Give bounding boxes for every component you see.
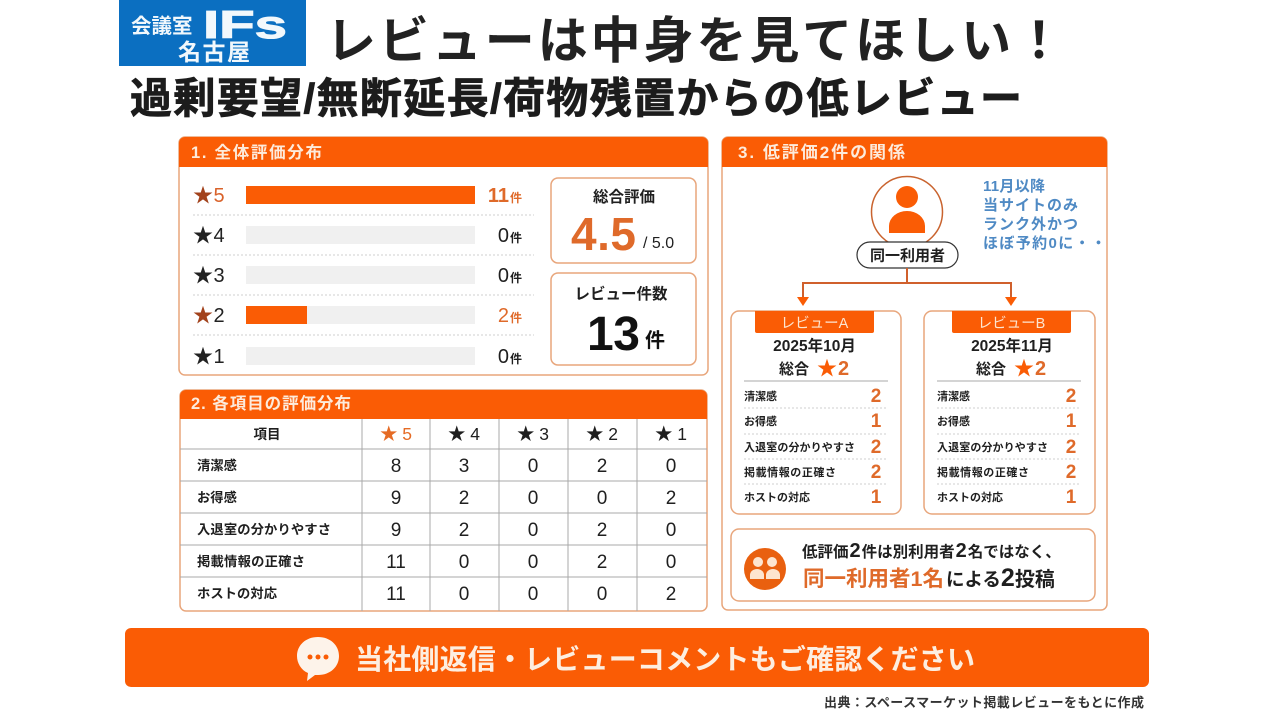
card: review B: 2 <box>1066 437 1076 458</box>
table row: listing accuracy: 2 <box>597 552 607 573</box>
table header row <box>254 424 687 444</box>
panel heading 1 <box>179 137 708 167</box>
panel heading 1: 1. 全体評価分布 <box>191 142 322 162</box>
card: review A: 2 <box>871 437 881 458</box>
callout: same user conclusion <box>731 529 1095 601</box>
card: review B: ★ <box>1014 358 1034 380</box>
banner: please check replies and comments <box>125 628 1149 687</box>
icon: two people <box>744 548 786 590</box>
card: review A: 1 <box>871 487 882 508</box>
card: overall score <box>551 178 696 263</box>
table row: cleanliness: 3 <box>459 456 469 477</box>
card: review B: 2025年11月 <box>971 336 1053 355</box>
row: 5 stars: 11 <box>488 185 509 207</box>
table row: value: お得感 <box>197 489 237 505</box>
note: blue annotation <box>983 178 1106 252</box>
row: 4 stars: ★4 <box>193 225 225 247</box>
card: review A: 2 <box>871 386 881 407</box>
table row: value: 2 <box>666 488 676 509</box>
table row: host response: 0 <box>528 584 538 605</box>
table row: cleanliness: 0 <box>666 456 676 477</box>
card: review B: ホストの対応 <box>937 490 1003 504</box>
tag: review B: レビューB <box>978 315 1045 332</box>
row: 5 stars <box>193 185 522 207</box>
note: blue annotation: ほぼ予約0に・・ <box>983 235 1106 252</box>
card: review A: ホストの対応 <box>744 490 810 504</box>
title: レビューは中身を見てほしい！ <box>326 13 1064 69</box>
row: 2 stars: ★2 <box>193 305 225 327</box>
note: blue annotation: ランク外かつ <box>983 215 1078 233</box>
table row: host response: 0 <box>459 584 469 605</box>
row: 2 stars: 件 <box>510 310 522 325</box>
card: review B: 総合 <box>976 361 1006 378</box>
icon: speech bubble <box>297 637 339 681</box>
row: 3 stars: ★3 <box>193 265 225 287</box>
same user label <box>857 242 958 268</box>
card: review B: 掲載情報の正確さ <box>937 465 1029 479</box>
row: 2 stars <box>193 305 522 327</box>
logo: IFs <box>203 4 287 47</box>
card: overall score: 4.5 <box>571 208 636 260</box>
row: 1 star <box>193 346 522 368</box>
table header row: ★ 1 <box>655 424 687 444</box>
row: 4 stars <box>193 225 522 247</box>
card: review A: 総合 <box>779 361 809 378</box>
card: review B: 1 <box>1066 487 1077 508</box>
card: review B: 2 <box>1066 386 1076 407</box>
card: review count: 件 <box>645 329 665 352</box>
table row: ease of entry: 0 <box>666 520 676 541</box>
banner: please check replies and comments: 当社側返信・レビューコメントもご確認ください <box>355 643 975 675</box>
card: review A: 入退室の分かりやすさ <box>744 440 855 454</box>
card: review B: 1 <box>1066 411 1077 432</box>
panel: per-item rating table <box>180 390 707 611</box>
table row: listing accuracy: 掲載情報の正確さ <box>197 553 305 569</box>
table row: host response: 11 <box>386 584 406 605</box>
card: review A: 清潔感 <box>744 389 777 403</box>
table row: cleanliness: 2 <box>597 456 607 477</box>
table row: listing accuracy: 0 <box>459 552 469 573</box>
row: 3 stars <box>193 265 522 287</box>
table header row: 項目 <box>254 427 280 442</box>
card: review B: 2 <box>1066 462 1076 483</box>
card: review count: レビュー件数 <box>574 284 668 303</box>
tag: review A <box>755 311 874 333</box>
panel: relationship of the two low ratings <box>722 137 1107 610</box>
table row: cleanliness: 0 <box>528 456 538 477</box>
table row: value: 0 <box>528 488 538 509</box>
row: 5 stars: 件 <box>510 190 522 205</box>
table header row: ★ 2 <box>586 424 618 444</box>
logo: 会議室 <box>131 15 192 38</box>
tag: review A: レビューA <box>781 315 849 332</box>
table row: ease of entry <box>197 520 676 541</box>
table row: listing accuracy: 0 <box>528 552 538 573</box>
row: 4 stars: 0 <box>498 225 509 247</box>
table row: ease of entry: 入退室の分かりやすさ <box>197 522 331 537</box>
card: review A: 2 <box>871 462 881 483</box>
card: overall score: 総合評価 <box>593 188 655 206</box>
table row: cleanliness <box>197 456 676 477</box>
row: 1 star: ★1 <box>193 346 225 368</box>
table row: ease of entry: 2 <box>597 520 607 541</box>
panel heading 3: 3. 低評価2件の関係 <box>738 143 905 162</box>
table header row: ★ 3 <box>517 424 549 444</box>
table row: cleanliness: 清潔感 <box>197 457 237 473</box>
card: review A <box>731 311 901 514</box>
table row: host response: 0 <box>597 584 607 605</box>
table row: value <box>197 488 676 509</box>
subtitle: 過剰要望/無断延長/荷物残置からの低レビュー <box>130 75 1022 122</box>
panel heading 2: 2. 各項目の評価分布 <box>191 393 351 413</box>
callout: same user conclusion: 低評価2件は別利用者2名ではなく、 <box>802 540 1061 562</box>
table row: value: 0 <box>597 488 607 509</box>
row: 5 stars: ★5 <box>193 185 225 207</box>
note: blue annotation: 当サイトのみ <box>983 196 1078 214</box>
source note: 出典：スペースマーケット掲載レビューをもとに作成 <box>824 695 1144 710</box>
table row: ease of entry: 0 <box>528 520 538 541</box>
same user label: 同一利用者 <box>870 248 945 264</box>
row: 1 star: 件 <box>510 351 522 366</box>
card: review A: 2 <box>838 358 849 380</box>
card: review B: 入退室の分かりやすさ <box>937 440 1048 454</box>
table row: listing accuracy: 0 <box>666 552 676 573</box>
table header row: ★ 4 <box>448 424 480 444</box>
row: 4 stars: 件 <box>510 230 522 245</box>
card: review A: 1 <box>871 411 882 432</box>
card: review B: お得感 <box>937 414 970 428</box>
logo <box>119 0 306 66</box>
card: review A: ★ <box>817 358 837 380</box>
card: review A: お得感 <box>744 414 777 428</box>
panel: overall rating distribution <box>179 137 708 375</box>
logo: 名古屋 <box>178 39 250 65</box>
arrows: user to reviews <box>797 268 1017 306</box>
table row: host response: 2 <box>666 584 676 605</box>
panel heading 2 <box>180 390 707 419</box>
callout: same user conclusion: 同一利用者1名による2投稿 <box>803 564 1055 592</box>
row: 2 stars: 2 <box>498 305 509 327</box>
table row: host response <box>197 584 676 605</box>
row: 3 stars: 件 <box>510 270 522 285</box>
row: 3 stars: 0 <box>498 265 509 287</box>
table row: ease of entry: 2 <box>459 520 469 541</box>
icon: user <box>872 176 942 248</box>
card: review A: 掲載情報の正確さ <box>744 465 836 479</box>
table header row: ★ 5 <box>380 424 412 444</box>
card: review B: 清潔感 <box>937 389 970 403</box>
table row: listing accuracy <box>197 552 676 573</box>
table row: listing accuracy: 11 <box>386 552 406 573</box>
row: 1 star: 0 <box>498 346 509 368</box>
table row: value: 2 <box>459 488 469 509</box>
table row: cleanliness: 8 <box>391 456 401 477</box>
card: review B <box>924 311 1095 514</box>
card: review count <box>551 273 696 365</box>
table row: value: 9 <box>391 488 401 509</box>
card: review count: 13 <box>587 308 640 361</box>
table row: ease of entry: 9 <box>391 520 401 541</box>
tag: review B <box>952 311 1071 333</box>
table row: host response: ホストの対応 <box>197 585 278 601</box>
card: review B: 2 <box>1035 358 1046 380</box>
card: overall score: / 5.0 <box>643 235 674 252</box>
panel heading 3 <box>722 137 1107 167</box>
note: blue annotation: 11月以降 <box>983 178 1045 195</box>
card: review A: 2025年10月 <box>773 336 856 355</box>
